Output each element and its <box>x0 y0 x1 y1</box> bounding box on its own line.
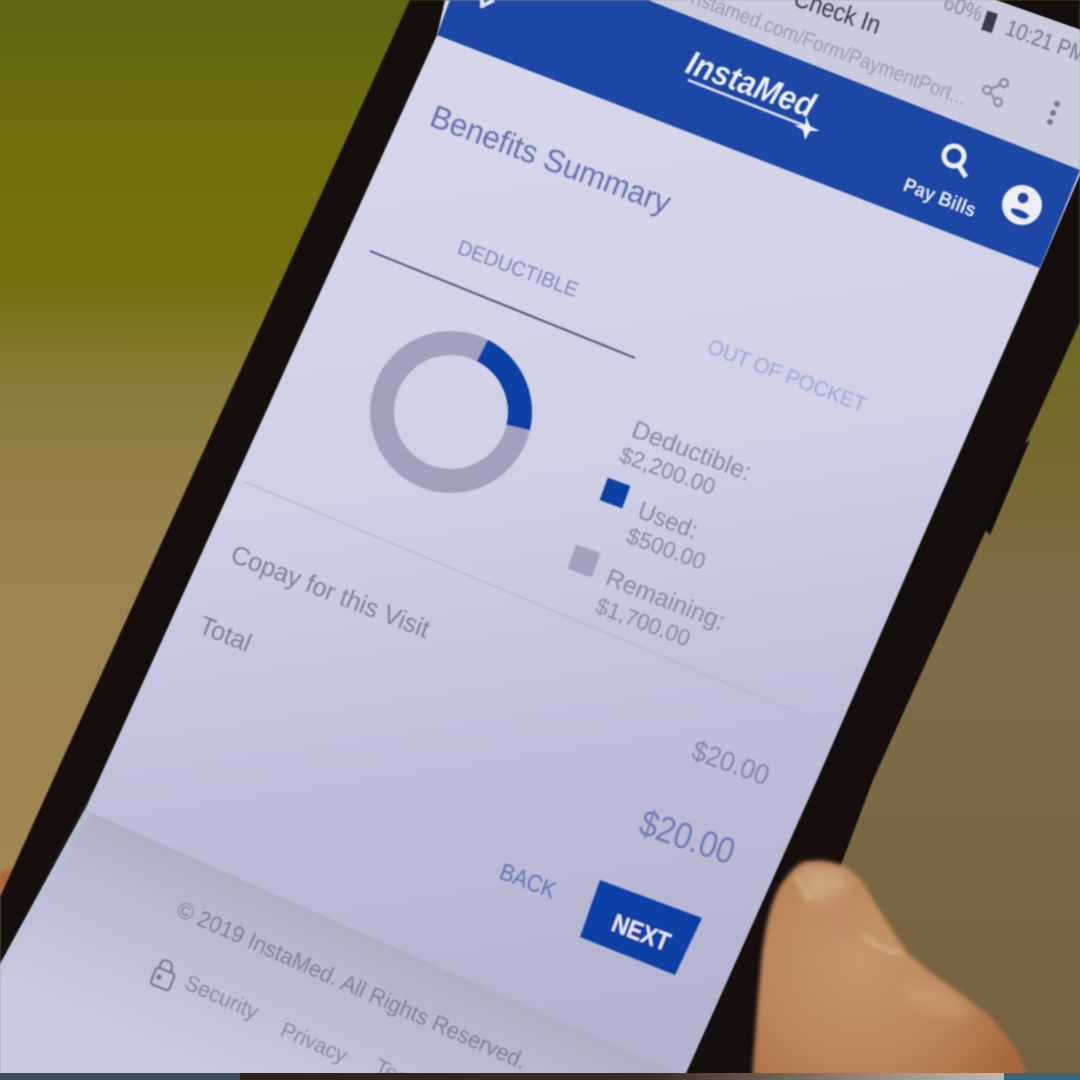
icon: share <box>983 79 1008 106</box>
next button: NEXT <box>608 908 675 957</box>
icon: lock <box>150 960 175 991</box>
Pay Bills label: Pay Bills <box>900 174 979 222</box>
remaining amount: Remaining: <box>602 564 729 636</box>
donut chart <box>382 343 520 481</box>
thumb tip highlight <box>800 866 850 905</box>
divider <box>245 482 815 720</box>
icon: user account <box>1002 185 1042 225</box>
screen edge highlight <box>0 790 102 980</box>
value: copay: $20.00 <box>688 735 774 791</box>
tab: out of pocket: OUT OF POCKET <box>704 335 869 417</box>
legend: $500.00 <box>623 522 709 575</box>
thumbnail highlight <box>795 875 902 953</box>
legend: $1,700.00 <box>592 592 694 651</box>
InstaMed logo: InstaMed <box>681 44 821 126</box>
deductible amount: Deductible: <box>628 415 756 487</box>
link: privacy: Privacy <box>277 1017 351 1068</box>
page footer band <box>0 810 680 1080</box>
label: total: Total <box>195 610 256 658</box>
bottom image strip <box>0 1073 1080 1080</box>
icon: battery <box>981 11 998 33</box>
tab: deductible: DEDUCTIBLE <box>454 236 581 302</box>
benefits content <box>150 98 869 1080</box>
legend swatch: remaining <box>567 544 601 578</box>
copyright: © 2019 InstaMed. All Rights Reserved. <box>173 896 531 1074</box>
browser status and address text <box>688 0 1080 125</box>
legend: $2,200.00 <box>616 441 719 500</box>
blue app header <box>437 0 1080 268</box>
header contents <box>482 0 1042 225</box>
tab underline <box>370 251 635 358</box>
link: security: Security <box>181 970 262 1024</box>
icon: search <box>944 146 966 177</box>
thumb joint highlight <box>897 975 973 1025</box>
used amount: Used: <box>634 496 702 545</box>
value: total: $20.00 <box>634 802 740 872</box>
thumb knuckle shade <box>820 888 860 942</box>
back arrow <box>482 0 494 8</box>
heading: Benefits Summary: Benefits Summary <box>426 98 676 221</box>
legend swatch: used <box>600 478 630 508</box>
label: copay: Copay for this Visit <box>227 539 435 644</box>
icon: menu dots <box>1047 101 1060 125</box>
browser address bar <box>648 0 1080 170</box>
finger at left edge <box>0 868 14 905</box>
footer text <box>150 896 531 1080</box>
thumb <box>752 861 1028 1080</box>
back link: BACK <box>496 858 560 904</box>
legend <box>567 415 756 651</box>
next button <box>580 880 702 975</box>
